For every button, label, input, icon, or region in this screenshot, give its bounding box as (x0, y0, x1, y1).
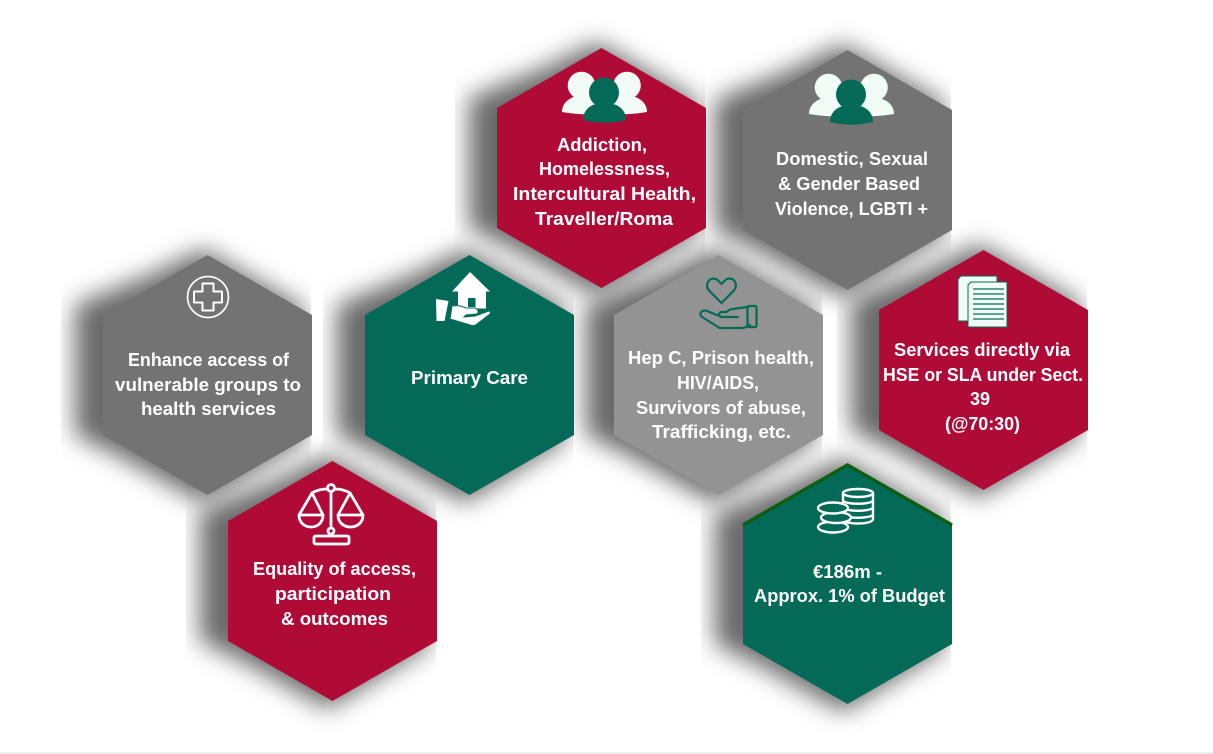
label: Hep C text: Trafficking, etc. (652, 421, 791, 442)
hexagon shadows (75, 42, 1079, 712)
label: Enhance access text: health services (141, 398, 276, 419)
label: Enhance access text: vulnerable groups to (115, 374, 301, 395)
label: Domestic violence text (775, 148, 928, 219)
hexagon: Equality of access (228, 461, 437, 701)
hexagon: Hep C, Prison health (614, 255, 823, 495)
icon: coin stacks (818, 489, 873, 532)
label: Equality text: participation (275, 583, 391, 604)
label: budget text (754, 561, 945, 606)
icon: documents (958, 276, 1007, 327)
label: Services text: (@70:30) (945, 413, 1020, 434)
icon: group of people (809, 74, 894, 125)
label: Addiction text (513, 134, 696, 229)
icon: heart above open hand (700, 278, 756, 328)
icon: house on a hand (436, 272, 491, 326)
top border (743, 465, 952, 525)
label: Domestic violence text: Violence, LGBTI + (775, 198, 928, 219)
icon: medical cross in circle (188, 276, 228, 318)
label: Hep C text: Survivors of abuse, (636, 397, 806, 418)
label: Equality text: & outcomes (281, 608, 388, 629)
label: budget text: Approx. 1% of Budget (754, 585, 945, 606)
label: Hep C text (628, 347, 814, 442)
hexagon: Enhance access (103, 255, 312, 495)
label: Enhance access text (115, 349, 301, 419)
hexagon: Primary Care (365, 255, 574, 495)
label: Addiction text: Traveller/Roma (535, 208, 674, 229)
label: Services text: 39 (970, 388, 990, 409)
hexagon: Addiction, Homelessness (497, 48, 706, 288)
label: Services text (883, 339, 1083, 434)
label: Addiction text: Homelessness, (539, 158, 670, 179)
label: Equality text (253, 558, 416, 629)
label: Domestic violence text: & Gender Based (778, 173, 920, 194)
label: Addiction text: Addiction, (557, 134, 647, 155)
label: Enhance access text: Enhance access of (128, 349, 290, 370)
label: Addiction text: Intercultural Health, (513, 183, 696, 204)
label: Domestic violence text: Domestic, Sexual (776, 148, 928, 169)
label: budget text: €186m - (813, 561, 882, 582)
icon: balance scales (299, 484, 363, 544)
label: Services text: Services directly via (894, 339, 1071, 360)
label: Primary Care text: Primary Care (411, 367, 528, 388)
hexagon: budget (743, 464, 952, 704)
label: Hep C text: Hep C, Prison health, (628, 347, 814, 368)
icon: group of people (562, 72, 647, 123)
label: Equality text: Equality of access, (253, 558, 416, 579)
hexagon: Services directly via HSE (879, 250, 1088, 490)
label: Hep C text: HIV/AIDS, (677, 372, 759, 393)
hexagon: Domestic, Sexual and Gender Based Violence (743, 50, 952, 290)
label: Services text: HSE or SLA under Sect. (883, 364, 1083, 385)
